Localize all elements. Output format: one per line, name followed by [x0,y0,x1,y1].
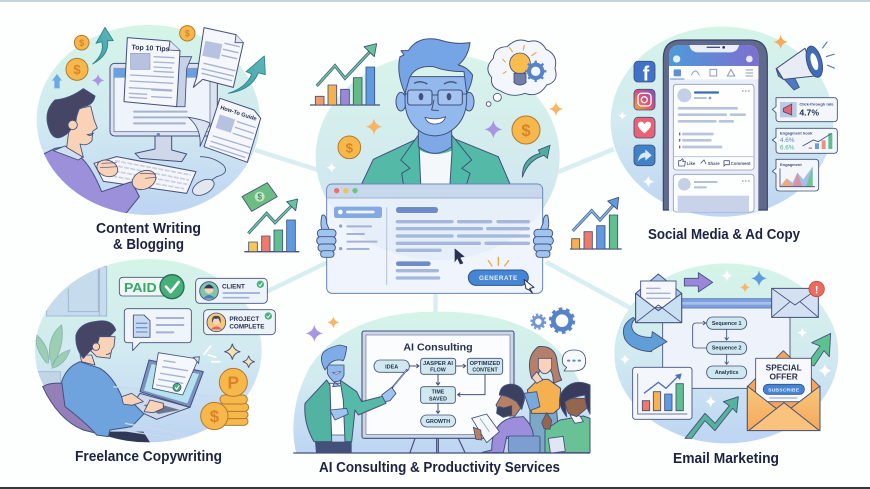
chair [43,383,97,433]
card: engagement [772,159,819,191]
top edge strip [0,0,870,2]
icon: coins: $ [346,140,354,155]
icon: mouse and cable [190,157,226,199]
baseline [293,451,590,455]
badge: paid: PAID [124,281,157,295]
card: click-through rate [772,98,837,122]
icon: document top 10 tips: Top 10 Tips [131,44,170,53]
woman in orange [524,346,562,453]
post card: Like [687,161,696,166]
icon: thought bubble with lightbulb and gear [486,40,556,106]
second post card [673,174,754,212]
person typing [42,89,159,213]
post card [673,84,754,170]
icon: share [634,145,655,166]
window and plant backdrop [36,267,107,388]
card: click-through rate: 4.7% [799,108,819,118]
flow node: time saved: SAVED [429,396,447,402]
card: project complete: PROJECT [229,316,259,323]
button: generate [468,270,528,285]
connector lines between center and panels [255,149,634,314]
card: client [196,278,267,303]
background dome [293,312,590,453]
icon: megaphone [776,42,835,90]
center background circle [316,53,560,260]
node: analytics: Analytics [715,370,739,376]
card: engagement hook: 6.6% [780,145,795,152]
flow node: idea: IDEA [385,364,398,370]
woman in green [542,382,590,453]
badge: paid [119,275,184,299]
whiteboard [362,331,514,453]
post card: Share [708,161,720,166]
bottom edge strip [0,487,870,489]
icon: coin stack: P [228,373,239,393]
flow node: optimized content: CONTENT [472,368,498,374]
flow node: growth: GROWTH [426,419,450,425]
icon: growth arrows [52,27,265,93]
left hand holding window [317,215,336,257]
icon: envelope with alert: ! [815,284,818,296]
heading: freelance copywriting: Freelance Copywriting [75,449,222,465]
speech bubble with document [124,309,191,351]
flow node: time saved: TIME [432,390,445,396]
flow node: idea [374,360,409,372]
icon: rear arrow [807,333,831,366]
icon: curved arrow [522,145,550,177]
panel: content writing and blogging [37,25,299,252]
bar chart left [310,44,380,105]
chart card [633,367,692,419]
icon: dollar coins: $ [73,62,81,77]
flow node: optimized content [467,358,503,374]
card: click-through rate: Click-through rate [799,101,834,106]
special offer envelope [747,351,820,431]
card: engagement hook: Engagment hook [780,130,813,135]
card: client: CLIENT [222,284,245,291]
icon: facebook: f [643,64,650,86]
panel: email marketing [614,263,838,443]
icon: document how-to guide [188,98,261,162]
icon: heart [634,117,655,138]
desk [113,387,217,439]
flow panel [663,299,790,388]
heading: email marketing: Email Marketing [673,451,779,467]
icon: keyboard [94,157,196,193]
person with glasses [362,39,510,184]
whiteboard: AI Consulting [403,342,473,353]
sequence arrows [693,321,729,364]
special offer envelope: OFFER [769,372,799,382]
icon: envelope with alert [772,281,824,317]
panel: social media and ad copy [570,27,837,249]
icon: facebook [634,61,655,86]
icon: purple arrow [684,273,713,292]
icon: coin stack [201,368,249,430]
flow node: jasper AI flow: JASPER AI [423,361,454,367]
flow arrows [409,364,485,413]
app window mockup [327,184,543,293]
icon: coins [338,116,540,159]
heading: content writing and blogging: Content Writing [96,221,201,237]
icon: monitor [110,63,217,162]
flow node: jasper AI flow [421,358,456,374]
bearded man with notes [472,384,540,453]
node: sequence 2: Sequence 2 [712,346,742,352]
icon: instagram [634,89,655,110]
panel: AI consulting [293,309,590,453]
icon: open envelope [636,274,682,323]
flow node: time saved [421,387,455,403]
card: engagement hook: 4.6% [780,137,795,144]
icon: purple sparkle [92,74,104,87]
icon: coins: $ [521,121,531,140]
icon: curved arrow [623,317,667,352]
card: engagement: Engagment [780,162,802,167]
background circle [35,259,262,442]
speech bubble [562,350,586,371]
button: generate: GENERATE [479,275,518,282]
icon: money and growth chart [242,183,299,252]
icon: money and growth chart: $ [257,193,262,202]
heading: second line: & Blogging [113,237,184,253]
background circle [611,27,833,217]
special offer envelope: SPECIAL [766,363,802,373]
icon: document [193,28,243,87]
heading: social media and ad copy: Social Media & Ad Copy [648,227,800,243]
icon: sparkles [620,270,832,407]
flow node: jasper AI flow: FLOW [430,368,447,374]
icon: document how-to guide: How-To Guide [219,105,257,123]
node: sequence 1: Sequence 1 [712,321,742,327]
icon: dollar coins: $ [79,38,84,48]
node: analytics [707,366,747,379]
icon: growth arrow [685,397,738,438]
icon: dollar coins [66,26,195,80]
person at laptop [62,321,150,442]
phone [663,40,767,212]
post card: Comment [731,161,751,166]
background circle [614,263,838,443]
icon: sparkles [204,344,255,368]
heading: AI consulting and productivity services: AI Consulting & Productivity Services [319,460,560,476]
growth chart [570,197,622,249]
icon: sparkles [618,35,788,187]
flow node: optimized content: OPTIMIZED [470,361,500,367]
card: project complete [204,310,275,335]
panel background circle [37,25,260,215]
laptop [122,353,203,419]
flow node: growth [421,415,456,427]
icon: document top 10 tips [124,38,192,107]
card: project complete: COMPLETE [229,324,265,331]
node: sequence 2 [707,342,747,354]
icon: cursors [455,248,534,293]
node: sequence 1 [707,317,747,329]
icon: dollar coins: $ [185,29,190,39]
special offer envelope: SUBSCRIBE [768,387,800,393]
icon: coin stack: $ [210,407,220,426]
panel: central figure [310,39,563,293]
right hand holding window [533,215,553,257]
panel: freelance copywriting [35,259,275,442]
icon: sparkles [327,102,563,173]
presenter [305,345,407,453]
card: engagement hook [772,128,837,153]
icon: sparkles [306,316,339,342]
icon: gears [531,309,574,332]
